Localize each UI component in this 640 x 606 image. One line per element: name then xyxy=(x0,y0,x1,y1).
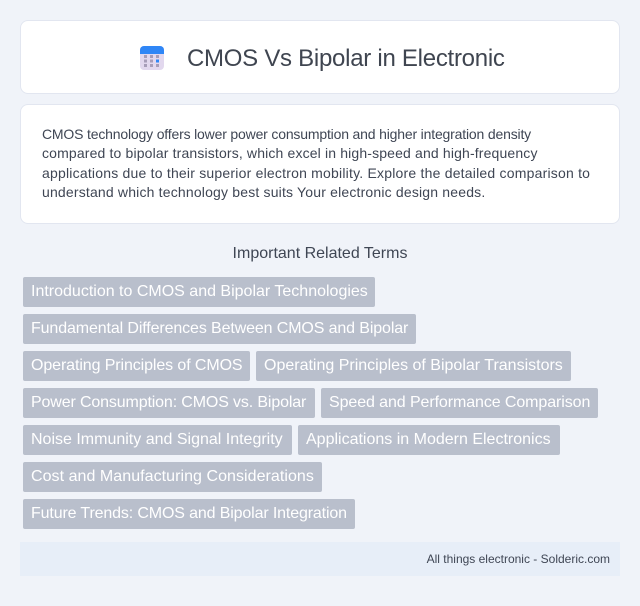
tag: Operating Principles of Bipolar Transistors xyxy=(264,357,563,374)
tag: Fundamental Differences Between CMOS and Bipolar xyxy=(31,320,408,337)
tag xyxy=(23,388,315,418)
intro text: CMOS technology offers lower power consumption and higher integration density xyxy=(42,126,531,142)
intro text: compared to bipolar transistors, which excel in high-speed and high-frequency xyxy=(42,145,538,161)
tag xyxy=(298,425,560,455)
title: CMOS Vs Bipolar in Electronic xyxy=(187,45,505,72)
panel: intro text card xyxy=(20,104,620,224)
footer bar xyxy=(20,542,620,576)
tag: Noise Immunity and Signal Integrity xyxy=(31,431,283,448)
tag xyxy=(23,425,292,455)
tag xyxy=(23,351,250,381)
tag xyxy=(321,388,598,418)
tag xyxy=(23,462,322,492)
tag: Cost and Manufacturing Considerations xyxy=(31,468,314,485)
icon: calendar xyxy=(140,46,164,70)
tag: Future Trends: CMOS and Bipolar Integration xyxy=(31,505,347,522)
tag: Operating Principles of CMOS xyxy=(31,357,243,374)
heading: important related terms: Important Related Terms xyxy=(233,245,407,262)
intro text: understand which technology best suits Your electronic design needs. xyxy=(42,184,485,200)
footer text: All things electronic - Solderic.com xyxy=(427,552,610,566)
tag: Speed and Performance Comparison xyxy=(329,394,590,411)
tag xyxy=(23,314,416,344)
tag xyxy=(23,499,355,529)
panel: title card xyxy=(20,20,620,94)
tag xyxy=(256,351,571,381)
intro text: applications due to their superior electron mobility. Explore the detailed comparison to xyxy=(42,165,590,181)
tag: Power Consumption: CMOS vs. Bipolar xyxy=(31,394,306,411)
tag xyxy=(23,277,375,307)
intro text xyxy=(42,126,590,200)
panel: related term tags xyxy=(23,277,598,529)
tag: Introduction to CMOS and Bipolar Technologies xyxy=(31,283,368,300)
tag: Applications in Modern Electronics xyxy=(306,431,551,448)
